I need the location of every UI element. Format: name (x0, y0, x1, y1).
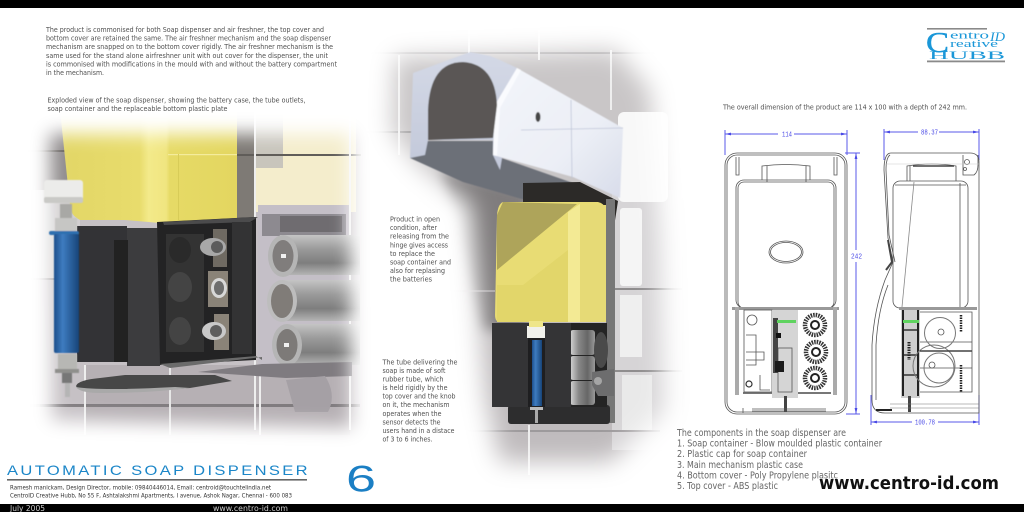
caption: open condition: hinge gives access (390, 241, 448, 249)
dimension: depth 88.37: 88.37 (921, 130, 938, 138)
intro text block: The product is commonised for both Soap dispenser and air freshner, the top cover and (45, 26, 324, 34)
dimension: height 242 (845, 153, 862, 414)
caption: delivery tube: operates when the (382, 410, 442, 418)
bottom plate (76, 375, 232, 389)
wall tiles (380, 39, 680, 476)
right side rail (606, 199, 615, 423)
logo: Centro ID Creative Hubb: entro (950, 30, 989, 42)
title: AUTOMATIC SOAP DISPENSER (7, 462, 310, 478)
logo: Centro ID Creative Hubb: reative (950, 39, 999, 50)
intro text block: in the mechanism. (46, 69, 104, 77)
photo: exploded soap dispenser (36, 120, 362, 437)
intro text block: bottom cover are retained the same. The air freshner mechanism and the soap dispenser (46, 35, 331, 43)
hinge latch (592, 369, 614, 396)
component list: 1. Soap container - Blow moulded plastic container (677, 439, 882, 450)
outer body (872, 153, 979, 413)
intro text block: is commonised with modifications in the mould with and without the battery compartment (46, 60, 337, 68)
website watermark: www.centro-id.com (819, 473, 999, 494)
lower mechanism case (492, 321, 614, 424)
page number: 6 (346, 458, 376, 500)
caption: delivery tube: users hand in a distace (382, 427, 454, 435)
caption: delivery tube: sensor detects the (382, 418, 440, 426)
top black bar (0, 0, 1024, 8)
caption: open condition: releasing from the (390, 233, 449, 241)
open top cover (410, 52, 623, 200)
caption: open condition: soap container and (390, 258, 451, 266)
batteries (267, 235, 360, 366)
caption: open condition: also for replasing (390, 267, 445, 275)
intro text block: mechanism are snapped on to the bottom cover rigidly. The air freshner mechanism is the (46, 43, 333, 51)
caption: delivery tube: on it, the mechanism (382, 401, 450, 409)
wall tiles (36, 120, 362, 437)
mechanism detail (876, 307, 979, 412)
tube assembly (44, 180, 83, 397)
logo: Centro ID Creative Hubb (926, 27, 1006, 62)
caption: delivery tube: The tube delivering the (382, 358, 458, 366)
component list: 3. Main mechanism plastic case (677, 460, 803, 471)
exploded view caption: soap container and the replaceable bottom plastic plate (48, 105, 228, 113)
lower shelf and bracket (198, 362, 352, 378)
hinge shadow behind cover (523, 182, 618, 240)
dimension: base 100.78: 100.78 (915, 420, 935, 428)
battery case back (262, 214, 346, 236)
contact details: Ramesh manickam, Design Director, mobile: 09840446014, Email: centroid@touchtelindia.net (10, 486, 272, 492)
component list: 4. Bottom cover - Poly Propylene plasitc (677, 470, 838, 481)
photo: dispenser in open condition (380, 39, 680, 476)
logo: Centro ID Creative Hubb: C (926, 27, 949, 59)
component list: The components in the soap dispenser are (676, 428, 846, 439)
dimension: height 242: 242 (851, 254, 862, 262)
caption: delivery tube: is held rigidly by the (382, 384, 448, 392)
black mechanism case (77, 226, 127, 362)
soap container (495, 202, 606, 322)
technical drawing: side view (871, 129, 979, 428)
technical drawing: front view (725, 130, 862, 414)
component list: 5. Top cover - ABS plastic (677, 481, 778, 492)
component list: 2. Plastic cap for soap container (677, 449, 807, 460)
logo: Centro ID Creative Hubb: ID (989, 29, 1006, 44)
dimension: base 100.78 (871, 395, 979, 428)
dark sensor window (428, 62, 497, 140)
caption: delivery tube: top cover and the knob (382, 393, 456, 401)
dimension: width 114: 114 (782, 132, 792, 140)
dimension: depth 88.37 (884, 129, 979, 160)
dimension: width 114 (725, 130, 847, 155)
outer body (725, 153, 847, 414)
intro text block: same used for the stand alone airfreshner unit with out cover for the dispenser, the unit (46, 52, 328, 60)
caption: delivery tube: of 3 to 6 inches. (382, 435, 432, 443)
contact details: CentroID Creative Hubb, No 55 F, Ashtalakshmi Apartments, I avenue, Ashok Nagar, Chennai - 600 083 (10, 494, 292, 500)
caption: delivery tube: rubber tube, which (382, 376, 444, 384)
mechanism detail (732, 307, 839, 413)
title underline (7, 479, 307, 481)
exploded view caption: Exploded view of the soap dispenser, showing the battery case, the tube outlets, (48, 96, 306, 104)
dimensions caption: The overall dimension of the product are 114 x 100 with a depth of 242 mm. (722, 104, 967, 112)
soap container (62, 122, 237, 223)
caption: delivery tube: soap is made of soft (382, 367, 446, 375)
bottom black bar (0, 504, 1024, 512)
battery contacts (200, 229, 229, 350)
caption: open condition: to replace the (390, 250, 435, 258)
caption: open condition: the batteries (390, 276, 432, 284)
caption: open condition: condition, after (390, 224, 437, 232)
logo: Centro ID Creative Hubb: HUBB (929, 48, 1005, 62)
oval badge (769, 241, 803, 263)
caption: open condition: Product in open (390, 216, 440, 224)
